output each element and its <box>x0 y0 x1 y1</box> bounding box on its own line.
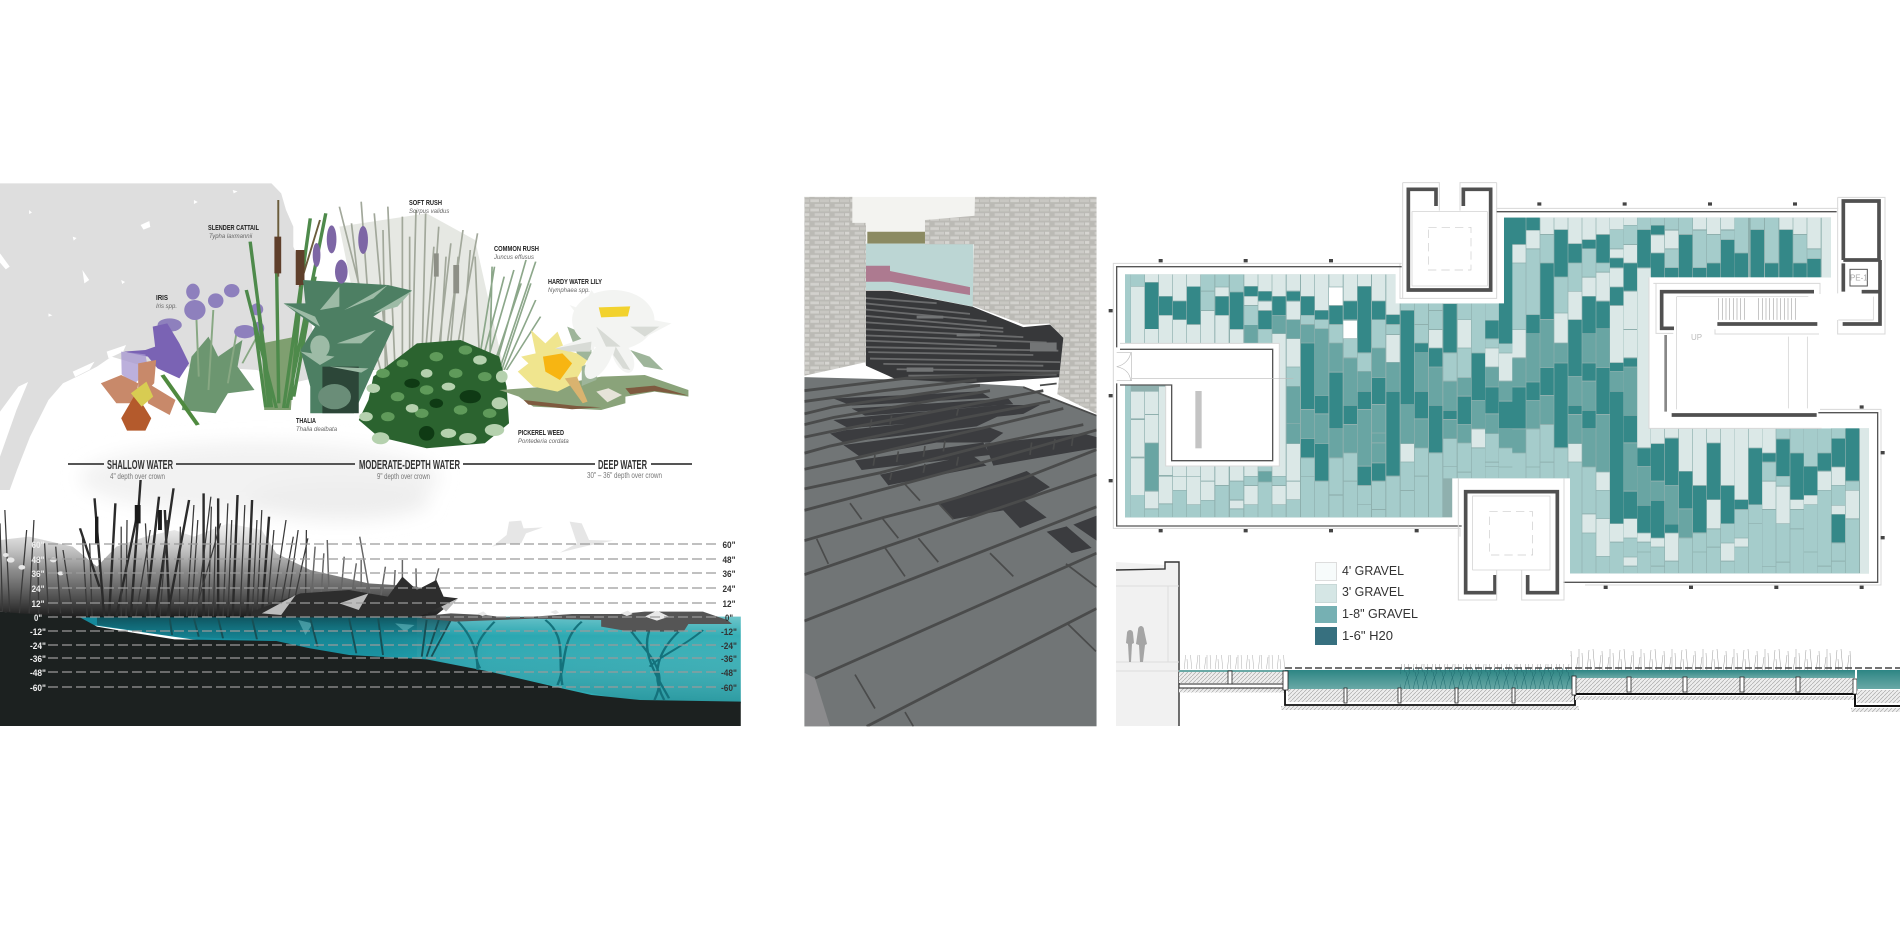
submerged reed reflection <box>97 617 451 657</box>
panel: building section <box>1116 562 1900 726</box>
edge strips <box>1125 218 1869 573</box>
left depth scale: -48" <box>30 668 46 679</box>
cranes <box>492 521 613 553</box>
section part 1 <box>1179 670 1285 692</box>
plant labels <box>156 198 602 445</box>
label: pickerel weed: PICKEREL WEED <box>518 428 564 437</box>
label: iris: Iris spp. <box>156 304 177 310</box>
label: hardy water lily <box>548 277 602 294</box>
zone: shallow water: SHALLOW WATER <box>107 457 173 472</box>
iris leaves and spikes <box>158 284 264 413</box>
label: common rush: Juncus effusus <box>493 255 534 261</box>
section part 4 <box>1851 670 1900 712</box>
white cut-outs <box>1120 170 1831 603</box>
right depth scale: 36" <box>722 569 736 580</box>
grass above section <box>1180 648 1855 672</box>
perimeter wall lines <box>1117 212 1878 582</box>
right depth scale: 60" <box>722 540 736 551</box>
glass balustrade <box>857 244 973 307</box>
water section diagram <box>0 480 741 726</box>
legend <box>1315 562 1418 645</box>
zone: deep water: 30" – 36" depth over crown <box>587 470 662 480</box>
panel: photo of roof trays <box>804 197 1097 726</box>
yellow water lily <box>518 330 589 403</box>
label: PE-1: PE-1 <box>1850 274 1868 283</box>
left depth scale: -60" <box>30 683 46 694</box>
right brick wall <box>1049 197 1097 414</box>
left depth scale: 12" <box>32 599 44 610</box>
soft rush <box>339 202 504 370</box>
white water lily <box>555 290 671 402</box>
label: iris: IRIS <box>156 293 168 302</box>
people <box>1126 626 1147 662</box>
label: thalia: THALIA <box>296 416 316 425</box>
infographic: wetland roof <box>0 182 1900 726</box>
depth gridlines <box>48 544 720 687</box>
tree silhouette <box>0 183 321 490</box>
label: slender cattail: SLENDER CATTAIL <box>208 223 259 232</box>
label: soft rush: Scirpus validus <box>409 209 449 215</box>
legend: 1-8 gravel: 1-8" GRAVEL <box>1342 607 1418 621</box>
open trays <box>830 391 1097 553</box>
south shaft <box>1458 478 1564 600</box>
right depth scale: 48" <box>722 555 736 566</box>
left depth scale: 60" <box>32 540 44 551</box>
slender cattail <box>246 200 326 410</box>
water body <box>80 617 741 703</box>
label: pickerel weed <box>518 428 569 445</box>
left depth scale: 0" <box>34 613 42 624</box>
gravel mid trays <box>1138 218 1852 573</box>
far brick wall <box>925 216 975 244</box>
left depth scale <box>30 540 46 694</box>
label: common rush: COMMON RUSH <box>494 244 539 253</box>
gravel 3ft light trays <box>1138 218 1852 566</box>
right depth scale: -12" <box>721 627 737 638</box>
gravel deep trays <box>1152 316 1686 537</box>
label: soft rush: SOFT RUSH <box>409 198 442 207</box>
column grid marks <box>1109 204 1885 587</box>
tray frames <box>804 373 1097 726</box>
zone: moderate-depth water <box>359 457 460 481</box>
lily pads <box>499 375 688 410</box>
left depth scale: 36" <box>32 569 44 580</box>
right depth scale: -36" <box>721 654 737 665</box>
plants: illustrated species <box>101 200 688 448</box>
label: iris <box>156 293 177 310</box>
left depth scale: -36" <box>30 654 46 665</box>
label: thalia: Thalia dealbata <box>296 427 338 433</box>
left depth scale: 24" <box>32 584 44 595</box>
legend: 3 ft gravel: 3' GRAVEL <box>1342 585 1404 599</box>
right depth scale: -48" <box>721 668 737 679</box>
sky and horizon <box>852 197 975 304</box>
label: hardy water lily: HARDY WATER LILY <box>548 277 602 286</box>
iris flower <box>101 323 198 431</box>
zone: deep water: DEEP WATER <box>598 457 647 472</box>
water trays <box>1152 218 1852 542</box>
elevator shaft <box>1408 189 1491 290</box>
floating lily pads <box>417 610 732 632</box>
right depth scale: 12" <box>722 599 736 610</box>
right depth scale: 0" <box>725 613 733 624</box>
left depth scale: 48" <box>32 555 44 566</box>
left depth scale: -12" <box>30 627 46 638</box>
right depth scale <box>721 540 737 694</box>
zone: shallow water: 4" depth over crown <box>110 471 165 481</box>
plan base <box>1125 218 1869 573</box>
left depth scale: -24" <box>30 641 46 652</box>
stair core walls <box>1662 201 1880 415</box>
right depth scale: -24" <box>721 641 737 652</box>
center brick wall <box>973 197 1065 325</box>
pickerel weed <box>359 340 509 448</box>
left brick wall <box>804 197 866 376</box>
depth zone header bar <box>68 457 692 481</box>
label: slender cattail <box>208 223 259 240</box>
light outer outlines <box>1113 183 1885 585</box>
section part 2: pool <box>1281 668 1579 710</box>
label: pickerel weed: Pontederia cordata <box>518 439 569 445</box>
lobby details <box>1117 353 1293 448</box>
legend: 4 ft gravel: 4' GRAVEL <box>1342 564 1404 578</box>
lower gravel deck <box>804 377 1097 726</box>
right depth scale: 24" <box>722 584 736 595</box>
panel: roof plan <box>1109 170 1885 603</box>
zone: shallow water <box>107 457 173 481</box>
legend: 1-6 water: 1-6" H20 <box>1342 629 1393 643</box>
label: stair up: UP <box>1691 333 1702 342</box>
zone: moderate-depth water: 9" depth over crown <box>377 471 430 481</box>
label: common rush <box>493 244 539 261</box>
far deck dark trays <box>861 291 1065 387</box>
reeds grayscale vegetation <box>0 480 458 617</box>
zone: moderate-depth water: MODERATE-DEPTH WATER <box>359 457 460 472</box>
section part 3: shallow tray <box>1572 670 1857 700</box>
label: hardy water lily: Nymphaea spp. <box>548 288 590 294</box>
right depth scale: -60" <box>721 683 737 694</box>
label: slender cattail: Typha laxmannii <box>209 234 253 240</box>
label: soft rush <box>409 198 449 215</box>
zone: deep water <box>587 457 662 480</box>
lily stems <box>458 620 703 700</box>
panel: plant palette and water depth section <box>0 183 741 726</box>
adjacent building <box>1116 562 1179 726</box>
parapet corner <box>804 673 830 726</box>
dashed water level <box>1285 667 1900 669</box>
common rush <box>478 260 541 370</box>
thalia <box>284 225 412 413</box>
tree shadow on ground <box>80 442 440 520</box>
label: thalia <box>296 416 338 433</box>
ground profile <box>0 612 741 726</box>
